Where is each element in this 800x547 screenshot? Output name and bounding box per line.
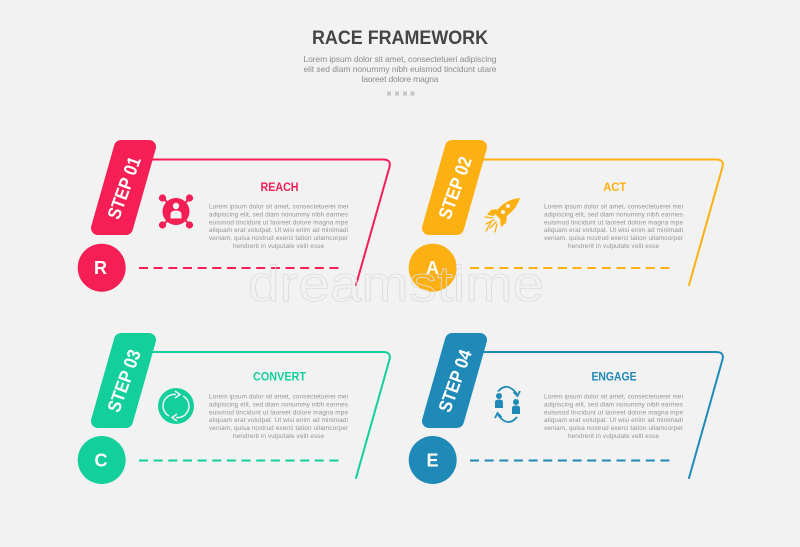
header (304, 27, 497, 96)
letter circle (409, 436, 457, 484)
letter circle (78, 244, 126, 292)
body text (209, 204, 349, 250)
subtitle: Lorem ipsum dolor sit amet, consectetueri adipiscing (304, 54, 497, 64)
body text: euismod tincidunt ut laoreet dolore magna mpe (209, 219, 348, 226)
body text: adipiscing elit, sed diam nonummy nibh earmes (544, 401, 683, 408)
body text: veniam, quisa nostrud exerci tation ullamcorper (209, 425, 349, 432)
heading: ENGAGE (592, 372, 637, 384)
subtitle (304, 54, 497, 84)
heading: CONVERT (253, 372, 306, 384)
body text: Lorem ipsum dolor sit amet, consectetuerei mei (544, 394, 683, 400)
letter circle: C (94, 450, 108, 470)
step badge: STEP 03 (103, 347, 145, 415)
frame line (150, 160, 390, 285)
title: RACE FRAMEWORK (312, 27, 488, 49)
body text: aliquam erat volutpat. Ut wisi enim ad minimadi (209, 417, 348, 424)
body text: Lorem ipsum dolor sit amet, consectetuerei mei (209, 394, 348, 400)
body text (544, 394, 684, 440)
dashed line (470, 460, 670, 462)
body text: aliquam erat volutpat. Ut wisi enim ad minimadi (209, 227, 348, 234)
body text: euismod tincidunt ut laoreet dolore magna mpe (544, 409, 683, 416)
icon: refresh cycle (158, 388, 194, 424)
icon: network person (159, 194, 193, 229)
letter circle: A (426, 258, 439, 278)
body text (209, 394, 349, 440)
body text: euismod tincidunt ut laoreet dolore magna mpe (209, 409, 348, 416)
body text: adipiscing elit, sed diam nonummy nibh earmes (544, 211, 683, 218)
letter circle: E (426, 450, 439, 470)
subtitle: laoreet dolore magna (362, 74, 439, 84)
letter circle (409, 244, 457, 292)
heading: ACT (603, 182, 626, 194)
letter circle (78, 436, 126, 484)
body text: veniam, quisa nostrud exerci tation ullamcorper (544, 235, 684, 242)
body text: veniam, quisa nostrud exerci tation ullamcorper (209, 235, 349, 242)
panel: convert (78, 340, 390, 484)
body text: hendrerit in vulputate velit esse (568, 243, 659, 250)
letter circle: R (94, 258, 107, 278)
panel: engage (409, 340, 723, 484)
body text: veniam, quisa nostrud exerci tation ullamcorper (544, 425, 684, 432)
body text: adipiscing elit, sed diam nonummy nibh earmes (209, 211, 348, 218)
body text: Lorem ipsum dolor sit amet, consectetuerei mei (544, 204, 683, 210)
dashed line (139, 267, 339, 269)
panel: reach (78, 147, 390, 292)
dashed line (139, 460, 339, 462)
body text: aliquam erat volutpat. Ut wisi enim ad minimadi (544, 227, 683, 234)
frame line (150, 352, 390, 478)
body text: aliquam erat volutpat. Ut wisi enim ad minimadi (544, 417, 683, 424)
body text: hendrerit in vulputate velit esse (568, 433, 659, 440)
body text: euismod tincidunt ut laoreet dolore magna mpe (544, 219, 683, 226)
panel: act (409, 147, 723, 292)
step badge: STEP 01 (103, 154, 145, 222)
subtitle: elit sed diam nonummy nibh euismod tincidunt utare (304, 64, 497, 74)
icon: two people exchange (495, 387, 520, 422)
watermark: dreamstime (248, 256, 544, 312)
heading: REACH (260, 182, 298, 194)
dashed line (470, 267, 670, 269)
body text: hendrerit in vulputate velit esse (233, 433, 324, 440)
body text (544, 204, 684, 250)
step badge: STEP 04 (434, 346, 476, 415)
step badge: STEP 02 (434, 154, 476, 222)
frame line (483, 352, 723, 478)
icon: rocket (485, 198, 520, 232)
body text: adipiscing elit, sed diam nonummy nibh earmes (209, 401, 348, 408)
pagination dots (387, 92, 414, 96)
body text: hendrerit in vulputate velit esse (233, 243, 324, 250)
body text: Lorem ipsum dolor sit amet, consectetuerei mei (209, 204, 348, 210)
frame line (483, 160, 723, 285)
